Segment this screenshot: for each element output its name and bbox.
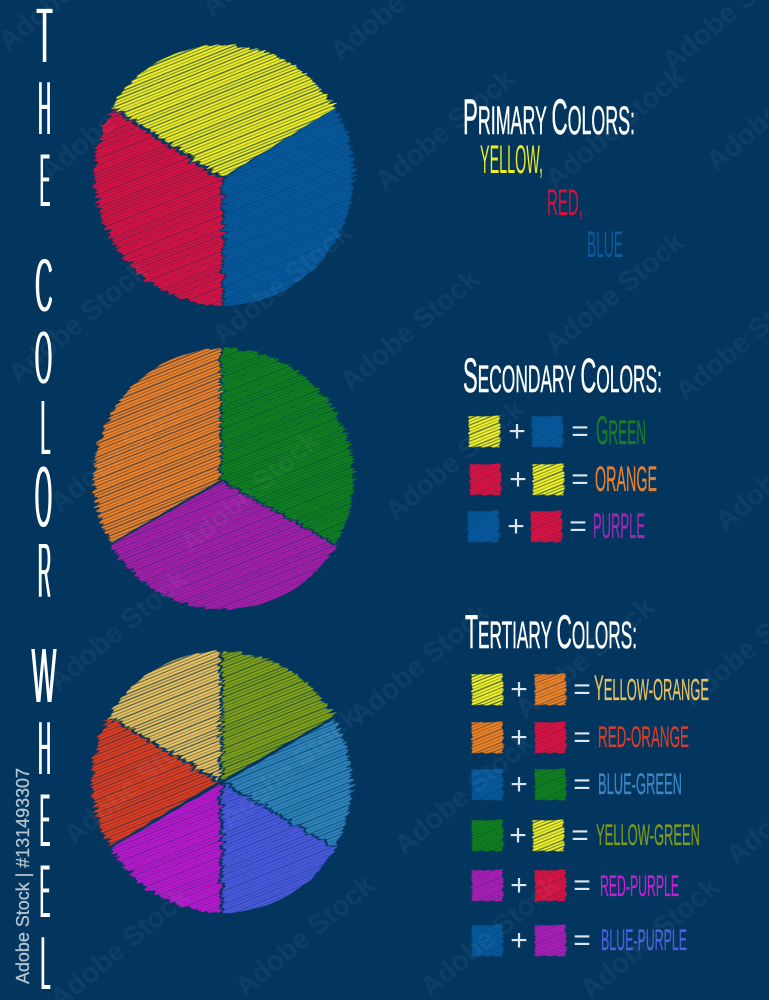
watermarks: Adobe Stock [34,53,185,187]
row: blue + purple = blue-purple: = [573,924,591,957]
panel: primary colors: RED, [547,182,583,223]
title: THE COLOR WHEEL: E [40,847,50,935]
watermarks: Adobe Stock [2,255,153,389]
title: THE COLOR WHEEL: H [38,65,51,152]
row: blue + red = purple [461,504,645,548]
watermarks: Adobe Stock [344,597,495,731]
watermarks: Adobe Stock [214,701,365,835]
row: orange + red = red-orange: + [510,721,528,754]
panel: secondary colors: GREEN [596,409,646,453]
text: ORANGE [595,460,657,499]
title: THE COLOR WHEEL: H [38,705,51,792]
row: yellow + orange = yellow-orange: = [573,673,591,706]
wedge: red [92,109,226,307]
wedge: red-orange [90,719,218,848]
watermarks: Adobe Stock [206,217,357,351]
stock image credit: Adobe Stock | #131493307 [13,768,33,984]
row: green + yellow = yellow-green: + [509,819,527,852]
watermarks: Adobe Stock [388,727,539,861]
row: yellow + orange = yellow-orange: + [510,673,528,706]
heading: tertiary colors: TERTIARY COLORS: [465,605,637,658]
wedge: red-purple [110,784,224,914]
row: blue + purple = blue-purple: + [510,924,528,957]
wedge: yellow-orange [107,650,224,781]
title: THE COLOR WHEEL: E [40,136,50,224]
row: purple + red = red-purple: = [573,869,591,902]
watermarks: Adobe Stock [379,393,530,527]
row: blue + green = blue-green: = [573,768,591,801]
row: orange + red = red-orange: = [573,721,591,754]
watermarks: Adobe Stock [334,263,485,397]
row: green + yellow = yellow-green [465,813,700,857]
chart: secondary color wheel [83,340,360,618]
panel: primary colors: YELLOW, [480,138,543,182]
wedge: blue-green [224,718,356,846]
row: purple + red = red-purple: + [510,869,528,902]
watermarks: Adobe Stock [174,425,325,559]
panel: secondary colors [461,350,662,548]
heading: secondary colors: SECONDARY COLORS: [463,350,662,403]
watermarks: Adobe Stock [58,717,209,851]
wedge: yellow-green [218,650,338,780]
text: PURPLE [593,507,645,546]
wedge: blue [220,107,358,306]
title: THE COLOR WHEEL: O [35,448,52,546]
row: blue + green = blue-green: + [510,768,528,801]
row: orange + red = red-orange [465,715,689,759]
heading: primary colors: PRIMARY COLORS: [463,89,635,145]
title: THE COLOR WHEEL: L [41,385,50,473]
row: yellow + orange = yellow-orange [465,667,709,711]
row: blue + green = blue-green [465,762,682,806]
watermarks: Adobe Stock [44,385,195,519]
text: BLUE [587,224,623,265]
chart: primary color wheel [85,35,362,314]
panel: primary colors [463,89,635,265]
watermarks: Adobe Stock [414,869,565,1000]
row: purple + red = red-purple [465,863,679,907]
title: THE COLOR WHEEL [32,0,56,1000]
panel: tertiary colors [465,605,709,962]
wedge: green [218,347,358,544]
title: THE COLOR WHEEL: W [32,630,56,720]
wedge: yellow [110,44,337,176]
watermarks: Adobe Stock [509,591,660,725]
watermarks: Adobe Stock [369,63,520,197]
wedge: blue-purple [219,784,338,914]
title: THE COLOR WHEEL: R [38,526,51,616]
row: blue + red = purple: = [569,510,587,543]
chart: tertiary color wheel [81,643,361,921]
watermarks: Adobe Stock [539,61,690,195]
title: THE COLOR WHEEL: C [35,243,53,329]
title: THE COLOR WHEEL: E [40,776,50,864]
row: blue + purple = blue-purple [465,918,687,962]
row: yellow + blue = green: + [508,415,526,448]
wedge: orange [91,348,224,544]
row: blue + red = purple: + [507,510,525,543]
watermarks: Adobe Stock [539,226,690,360]
row: yellow + blue = green [462,409,646,453]
row: red + yellow = orange [463,457,657,501]
row: yellow + blue = green: = [571,415,589,448]
row: red + yellow = orange: + [509,463,527,496]
wedge: purple [110,481,338,610]
row: red + yellow = orange: = [571,463,589,496]
watermarks: Adobe Stock [42,563,193,697]
row: green + yellow = yellow-green: = [571,819,589,852]
title: THE COLOR WHEEL: O [35,315,52,400]
watermarks: Adobe Stock [229,869,380,1000]
